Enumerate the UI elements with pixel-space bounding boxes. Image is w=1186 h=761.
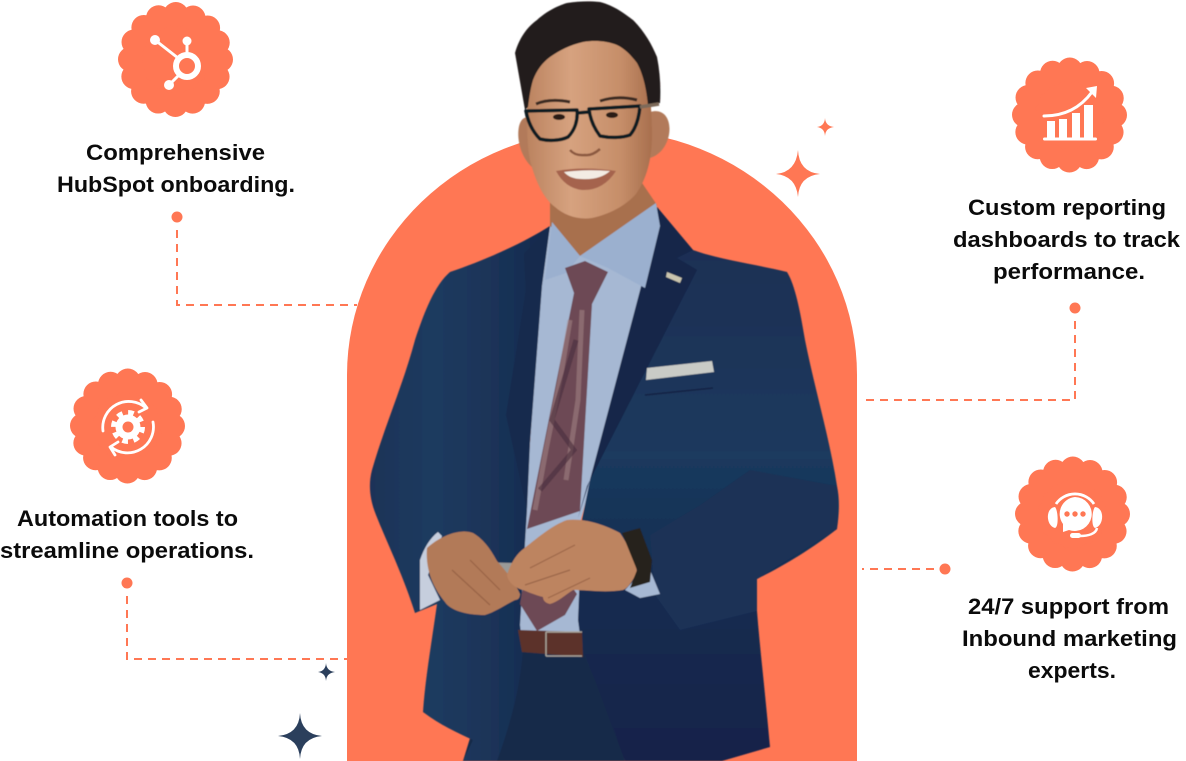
text: reporting: Custom reporting	[968, 195, 1166, 220]
text: automation: Automation tools to	[17, 506, 238, 531]
badge: chart icon	[1020, 65, 1120, 165]
breast pocket line	[645, 388, 713, 395]
knuckle lines	[452, 545, 590, 605]
panel: orange arch background	[347, 130, 857, 761]
connector: support	[862, 564, 950, 574]
face	[527, 32, 652, 218]
right hand	[507, 520, 637, 604]
lapel pin	[666, 272, 682, 283]
jacket: left side	[370, 226, 550, 761]
icon: gear with cycle arrows	[103, 400, 153, 455]
nose shadow	[570, 149, 600, 155]
left cuff	[420, 532, 442, 610]
sparkle: large orange	[776, 150, 820, 197]
jacket: right side	[578, 207, 839, 761]
pocket square	[646, 361, 714, 380]
right cuff	[625, 565, 660, 598]
sparkle: small navy	[318, 663, 335, 681]
trousers	[463, 640, 625, 761]
text: support: experts.	[1028, 658, 1116, 683]
sparkle: small orange	[817, 118, 834, 136]
text: automation: streamline operations.	[0, 538, 254, 563]
sparkle: large navy	[278, 713, 322, 759]
hair	[515, 1, 660, 110]
eyebrows	[536, 98, 637, 104]
badge: automation icon	[78, 376, 178, 476]
teeth	[564, 170, 610, 179]
forearm sleeve shading	[650, 470, 837, 630]
text: support: 24/7 support from	[968, 594, 1169, 619]
connector: onboarding	[172, 212, 357, 305]
icon: HubSpot sprocket	[150, 35, 198, 90]
text: reporting: performance.	[993, 259, 1145, 284]
ears	[518, 111, 670, 167]
text: reporting	[953, 195, 1181, 284]
icon: rising bar chart	[1043, 86, 1097, 140]
shirt	[515, 205, 656, 632]
badge: HubSpot icon	[126, 10, 226, 110]
left lapel	[506, 226, 550, 510]
neck	[550, 180, 657, 262]
eyes	[553, 112, 618, 120]
wristwatch	[622, 528, 652, 588]
text: onboarding: HubSpot onboarding.	[57, 172, 295, 197]
left hand	[427, 531, 520, 615]
necktie	[520, 261, 608, 631]
smile	[556, 168, 616, 190]
photo: smiling man in navy suit	[370, 1, 839, 761]
badge: support icon	[1022, 464, 1122, 564]
icon: headset with chat bubble	[1048, 494, 1102, 538]
text: reporting: dashboards to track	[953, 227, 1181, 252]
shirt collar	[545, 203, 660, 288]
eyeglasses	[526, 104, 659, 140]
text: onboarding: Comprehensive	[86, 140, 265, 165]
text: onboarding	[57, 140, 295, 197]
text: support	[962, 594, 1177, 683]
text: automation	[0, 506, 254, 563]
connector: reporting	[862, 302, 1080, 400]
right lapel	[578, 207, 697, 518]
belt	[518, 630, 583, 657]
text: support: Inbound marketing	[962, 626, 1177, 651]
connector: automation	[122, 578, 347, 659]
phone	[473, 562, 517, 582]
